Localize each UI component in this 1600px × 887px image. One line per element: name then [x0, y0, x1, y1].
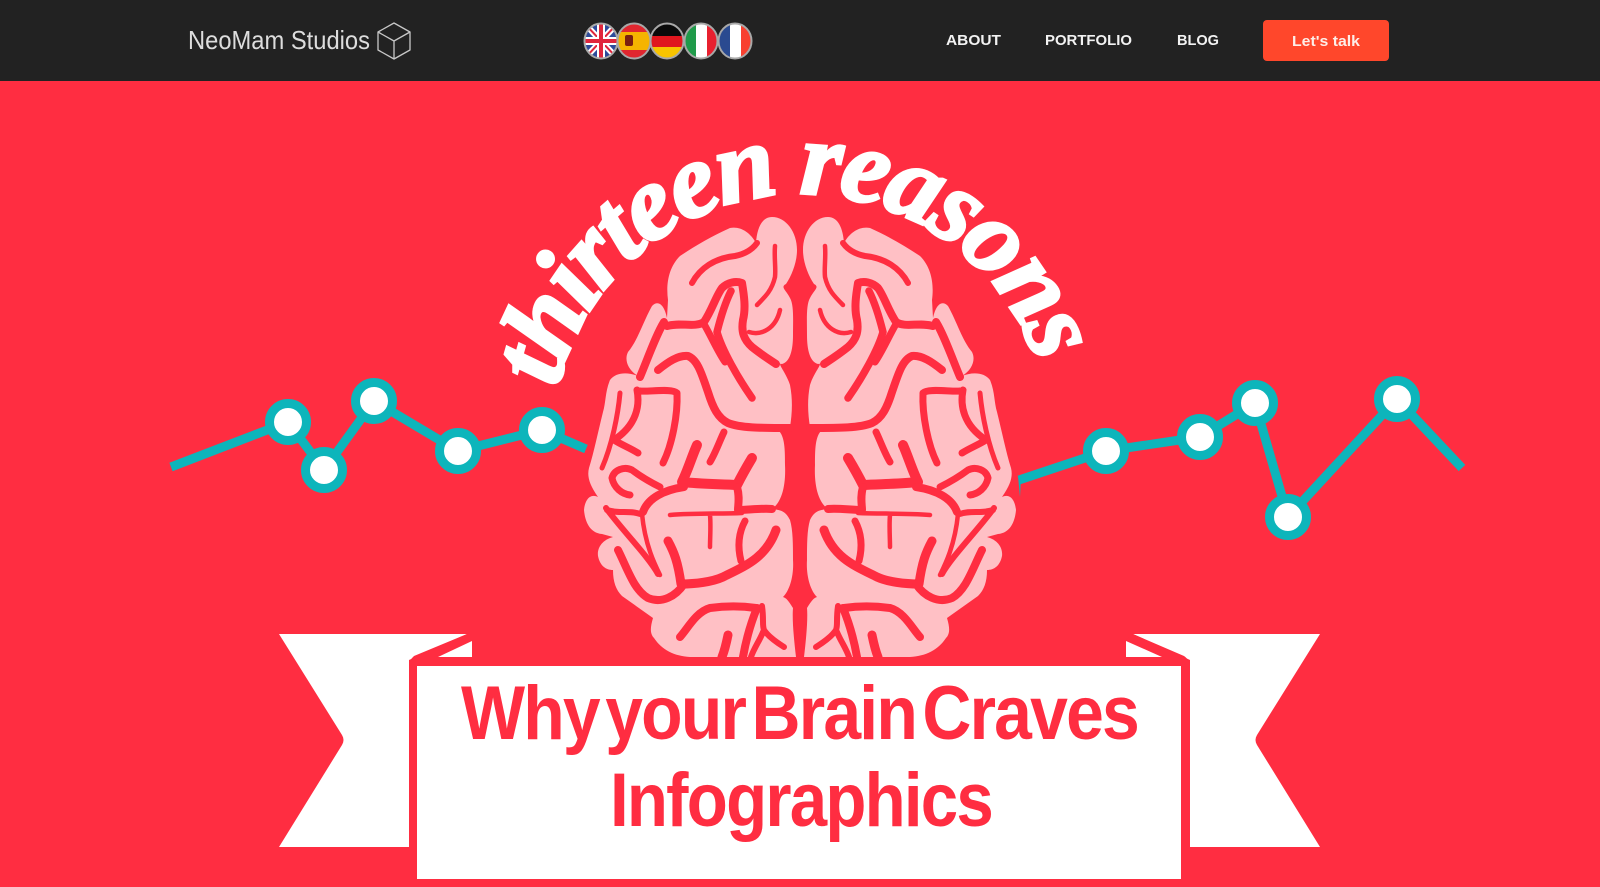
navigation bar: [0, 0, 1600, 81]
flag: Italy: [684, 24, 718, 58]
flag: UK: [584, 24, 618, 58]
line chart: right: [1018, 380, 1462, 536]
right hemisphere: [803, 217, 1016, 657]
flag: Spain: [618, 24, 650, 58]
curved heading: thirteen reasons: thirteen reasons: [499, 143, 1083, 384]
title line 2: Infographics: [610, 758, 992, 843]
ribbon tail: right: [1133, 634, 1320, 847]
button: let's talk: [1263, 20, 1389, 61]
flags: [584, 24, 752, 58]
ribbon fold triangle: left: [438, 641, 472, 657]
flag: Germany: [650, 24, 684, 58]
title ribbon: [279, 634, 1320, 887]
nav link: blog: BLOG: [1177, 32, 1219, 49]
ribbon fold: left: [409, 634, 472, 668]
ribbon fold triangle: right: [1126, 641, 1162, 657]
nav link: about: ABOUT: [946, 32, 1001, 49]
title line 1: Why your Brain Craves: [461, 671, 1138, 756]
nav link: portfolio: PORTFOLIO: [1045, 32, 1132, 49]
left hemisphere: [584, 217, 797, 657]
icon: logo cube: [378, 23, 410, 59]
button: let's talk: Let's talk: [1292, 33, 1361, 50]
flag: France: [718, 24, 752, 58]
ribbon panel border: [409, 657, 1190, 887]
ribbon tail: left: [279, 634, 467, 847]
logo text: NeoMam Studios: [188, 25, 370, 55]
ribbon panel: [417, 666, 1181, 879]
line chart: left: [171, 382, 586, 488]
ribbon fold: right: [1126, 634, 1190, 668]
brain illustration: [584, 217, 1016, 657]
